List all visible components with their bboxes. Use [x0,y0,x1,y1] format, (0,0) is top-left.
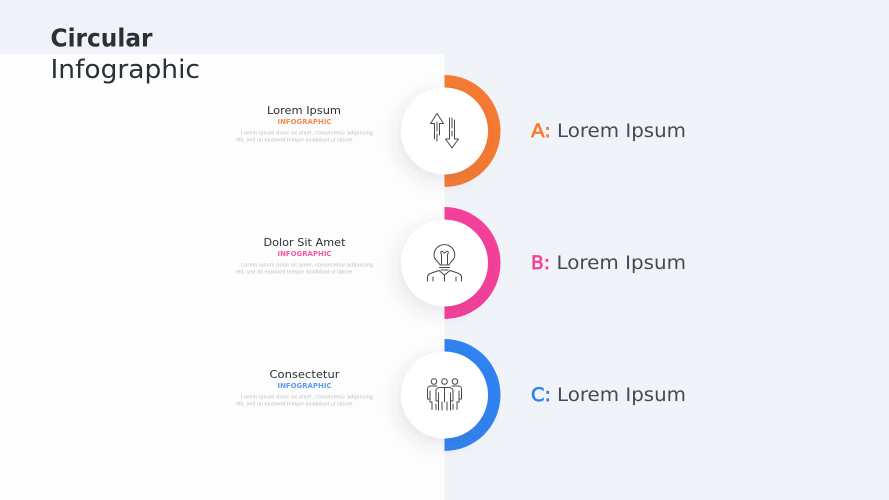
text block C: elit, sed do eiusmod tempor incididunt ut labore. [236,402,354,408]
white left panel [0,54,444,500]
title: Circular [50,24,153,52]
step A [236,75,686,187]
text block C: Consectetur [270,368,340,381]
icon: person with lightbulb head [428,245,462,281]
step B [236,207,686,319]
text block A [236,104,373,144]
half ring B [444,207,500,319]
title [50,24,200,85]
text block A: elit, sed do eiusmod tempor incididunt ut labore. [236,138,354,144]
text block B [236,236,373,276]
text block A: Lorem ipsum dolor sit amet, consectetur adipiscing [241,130,373,136]
half ring C [444,339,500,451]
text block C: Lorem ipsum dolor sit amet, consectetur adipiscing [241,394,373,400]
text block B: Lorem ipsum dolor sit amet, consectetur adipiscing [241,262,373,268]
circle B [401,220,488,306]
text block B: Dolor Sit Amet [264,236,346,249]
title: Infographic [50,55,200,85]
label B: B: [531,252,550,274]
label C: C: [531,384,551,406]
icon: up and down arrows [430,114,458,148]
label B: Lorem Ipsum [556,252,686,274]
half ring A [444,75,500,187]
circle A [401,88,488,174]
text block B: INFOGRAPHIC [278,250,332,258]
text block A: INFOGRAPHIC [278,118,332,126]
icon: three people [428,379,462,410]
label A: Lorem Ipsum [557,120,686,142]
label C: Lorem Ipsum [557,384,686,406]
text block A: Lorem Ipsum [267,104,341,117]
text block B: elit, sed do eiusmod tempor incididunt ut labore. [236,270,354,276]
text block C: INFOGRAPHIC [278,382,332,390]
step C [236,339,686,451]
text block C [236,368,373,408]
circle C [401,352,488,438]
label A: A: [531,120,551,142]
